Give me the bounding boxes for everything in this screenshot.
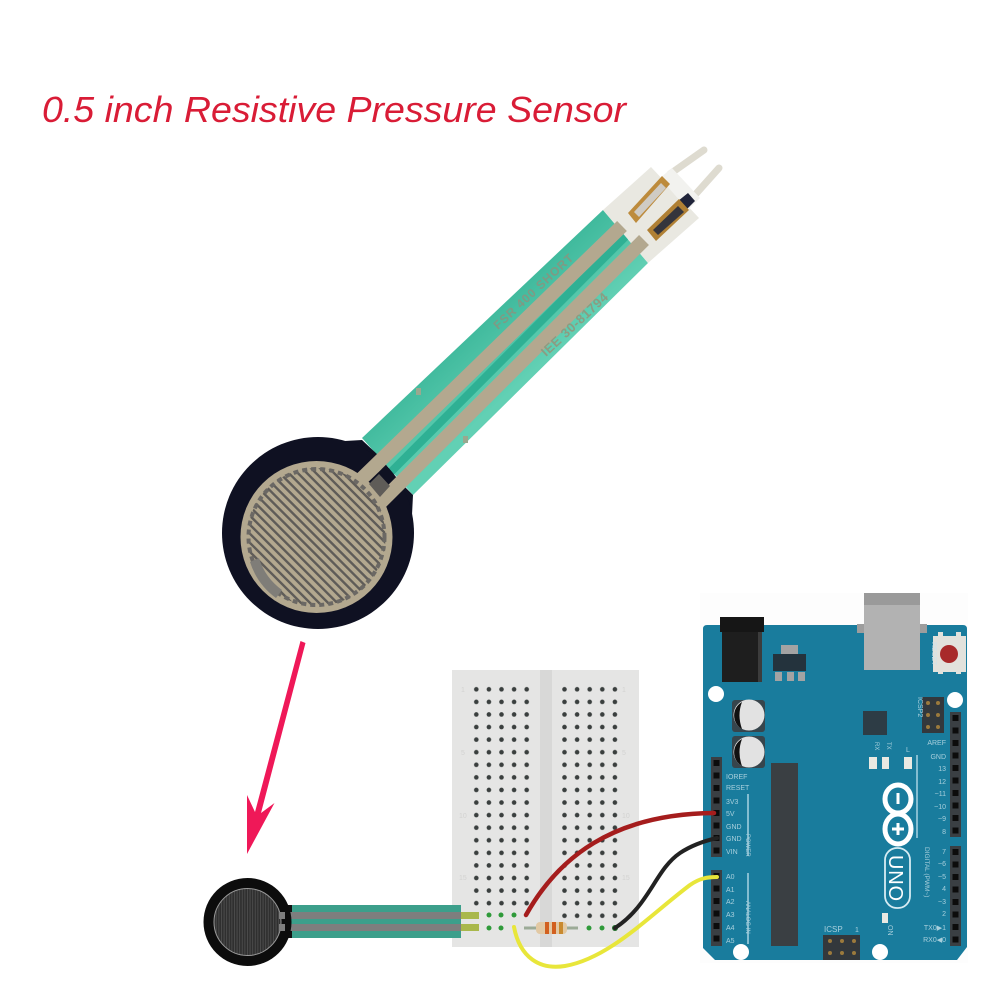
sensor tan conductive traces	[350, 226, 644, 511]
small sensor diagram	[204, 878, 479, 966]
arduino left pin labels: A4	[726, 925, 735, 932]
sensor interdigitated circle	[240, 461, 392, 613]
arduino left pin labels: RESET	[726, 785, 750, 792]
arduino left pin labels: 5V	[726, 811, 735, 818]
arduino small board labels: ANALOG IN	[744, 901, 750, 934]
arduino right pin labels: ~11	[935, 791, 946, 798]
arduino left pin labels: A5	[726, 938, 735, 945]
arduino right pin labels	[923, 740, 946, 944]
arduino reset button: RESET	[930, 642, 937, 666]
arduino pcb	[703, 625, 967, 960]
arduino right pin labels: ~3	[938, 899, 946, 906]
arduino small board labels: ON	[886, 925, 893, 936]
arduino small board labels: L	[906, 747, 910, 754]
arduino power jack	[720, 617, 764, 682]
arduino right pin labels: 2	[942, 911, 946, 918]
breadboard green connected holes	[486, 912, 618, 931]
arduino status leds	[869, 757, 912, 923]
arduino right pin labels: TX0▶1	[924, 925, 946, 932]
arduino icsp header	[823, 935, 860, 960]
arduino right pin labels: 13	[938, 766, 946, 773]
arduino small board labels: RX	[873, 742, 879, 750]
title: 0.5 inch Resistive Pressure Sensor	[42, 89, 628, 130]
arduino right pin labels: ~6	[938, 861, 946, 868]
arduino left pin labels: VIN	[726, 849, 738, 856]
arduino left pin labels: IOREF	[726, 774, 747, 781]
arduino small board labels: ICSP2	[916, 697, 923, 717]
breadboard holes left block	[470, 683, 533, 909]
arduino left pin labels: 3V3	[726, 799, 739, 806]
small sensor strip	[291, 905, 461, 938]
arrow: pink pointer to small sensor	[247, 641, 306, 854]
wire: black ground	[615, 838, 717, 928]
arduino small board labels: 1	[855, 927, 859, 934]
breadboard body	[452, 670, 639, 947]
arduino left pin labels: GND	[726, 836, 742, 843]
arduino right pin labels: 8	[942, 829, 946, 836]
breadboard row numbers: 1	[622, 687, 626, 694]
sensor white end tab	[603, 167, 699, 263]
breadboard	[452, 670, 639, 947]
arduino usb body over pcb	[864, 625, 920, 670]
breadboard row numbers: 15	[459, 875, 467, 882]
arduino main microcontroller	[771, 763, 798, 946]
sensor printed part number: IEE 30-81794	[538, 289, 612, 359]
arduino small board labels: ICSP	[824, 925, 843, 934]
arduino capacitors	[732, 700, 765, 768]
arduino uno board	[700, 593, 968, 963]
breadboard row numbers: 15	[622, 875, 630, 882]
arduino reset button	[930, 632, 966, 674]
wire: yellow analog	[514, 877, 717, 967]
arduino left pin labels: A1	[726, 887, 735, 894]
arduino left pin labels: GND	[726, 824, 742, 831]
breadboard row numbers: 5	[461, 750, 465, 757]
small sensor gold leads	[461, 912, 479, 931]
arduino right pin labels: RX0◀0	[923, 937, 946, 944]
arduino right pin labels: ~10	[934, 804, 946, 811]
arduino small board labels: TX	[885, 742, 891, 750]
arduino left pin labels	[726, 774, 750, 945]
arduino right pin labels: 12	[938, 779, 946, 786]
sensor crimp connectors	[628, 176, 689, 241]
sensor printed marking: FSR 400 SHORT	[490, 251, 577, 332]
breadboard row numbers: 1	[461, 687, 465, 694]
sensor black round body	[222, 437, 414, 629]
sensor connector housing	[660, 168, 700, 210]
breadboard row numbers: 5	[622, 750, 626, 757]
arduino left pin labels: A2	[726, 899, 735, 906]
breadboard row numbers	[459, 687, 630, 882]
arduino right pin labels: AREF	[927, 740, 946, 747]
sensor pins	[670, 150, 719, 196]
breadboard row numbers: 10	[622, 813, 630, 820]
arduino usb chip	[863, 711, 887, 735]
sensor green film strip	[362, 210, 648, 495]
small sensor black disc	[204, 878, 292, 966]
breadboard holes right block	[558, 683, 621, 922]
breadboard row numbers: 10	[459, 813, 467, 820]
sensor green channel between traces	[376, 236, 626, 487]
resistor	[524, 922, 578, 934]
arduino icsp2 header	[922, 697, 944, 733]
breadboard centre groove	[540, 670, 552, 947]
arduino right pin labels: 4	[942, 886, 946, 893]
arduino right pin labels: ~9	[938, 816, 946, 823]
sensor small tick marks	[416, 388, 468, 443]
arduino left pin labels: A3	[726, 912, 735, 919]
arduino uno logotype: UNO	[884, 855, 906, 901]
arduino voltage regulator	[773, 645, 806, 681]
arduino faint backing	[700, 593, 968, 963]
arduino right pin labels: 7	[942, 849, 946, 856]
arduino pin headers	[711, 712, 961, 946]
wire: red 5V	[526, 813, 714, 915]
small sensor gray traces	[281, 912, 461, 931]
photo: large round pressure sensor	[210, 150, 719, 644]
arduino small board labels: POWER	[744, 834, 750, 857]
arduino small board labels: DIGITAL (PWM~)	[923, 847, 930, 897]
arduino right pin labels: ~5	[938, 874, 946, 881]
arduino usb port	[857, 593, 927, 670]
arduino right pin labels: GND	[930, 754, 946, 761]
arduino left pin labels: A0	[726, 874, 735, 881]
arduino infinity logo	[885, 785, 911, 844]
arduino small board labels	[744, 697, 930, 936]
arduino mounting holes	[708, 686, 963, 960]
arduino silkscreen lines	[748, 755, 917, 944]
arduino uno logotype	[884, 848, 910, 908]
